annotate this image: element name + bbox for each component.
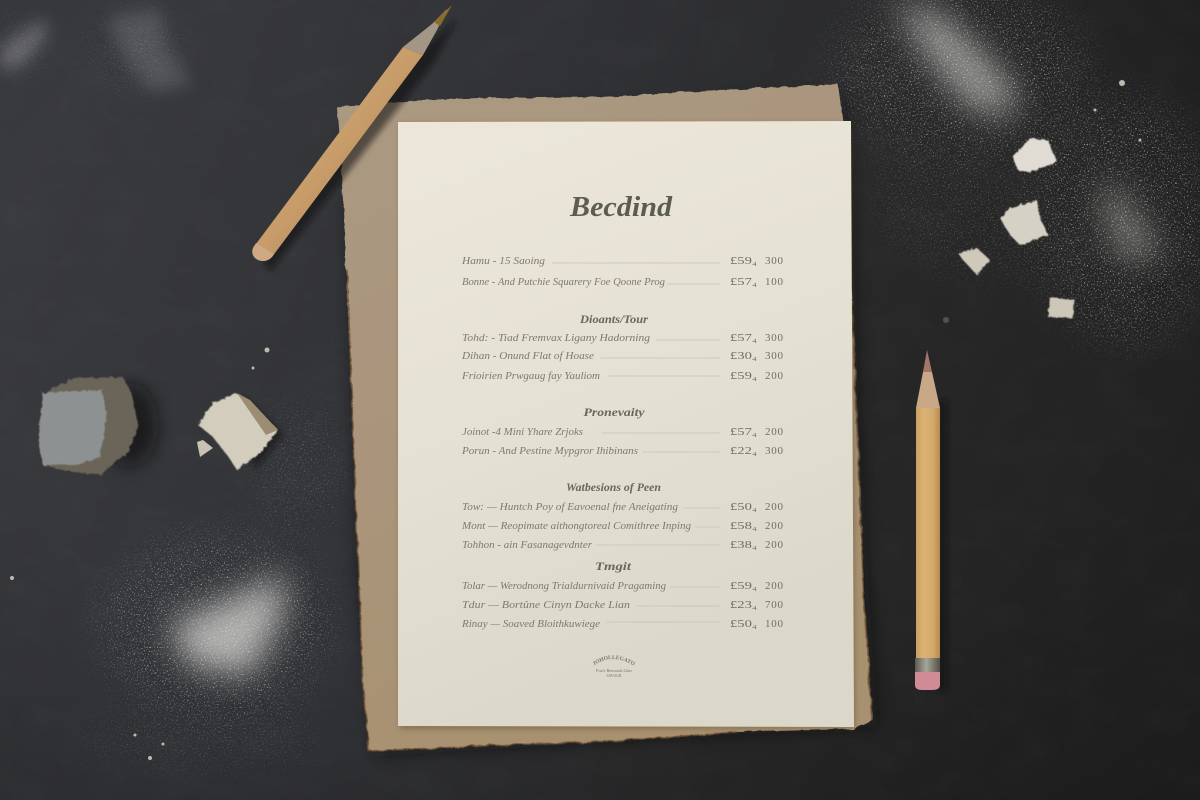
section 2 rows: Frioirien Prwgaug fay Yauliom [461, 371, 600, 382]
section 3 rows: £22₄ [730, 445, 757, 457]
section 4 rows: 200 [765, 539, 784, 551]
section 4 rows: £58₄ [730, 520, 757, 532]
section 3 rows: Joinot -4 Mini Yhare Zrjoks [462, 427, 583, 438]
menu content [461, 191, 784, 678]
section 4 rows: 200 [765, 501, 784, 513]
section 4 rows [461, 501, 784, 551]
pencil: diagonal top left [252, 5, 458, 272]
section 3 rows: Porun - And Pestine Mypgror Ihibinans [461, 446, 638, 457]
section 2 rows: £59₄ [730, 370, 757, 382]
section heading: Pronevaity: Pronevaity [584, 405, 645, 419]
section 5 rows: £23₄ [730, 599, 757, 611]
section 4 rows: Tow: — Huntch Poy of Eavoenal fne Aneigating [462, 502, 678, 513]
section 5 rows: 100 [765, 618, 784, 630]
section 4 rows: £50₄ [730, 501, 757, 513]
section 2 rows: 300 [765, 332, 784, 344]
section 1 rows: 100 [765, 276, 784, 288]
section 4 rows: Tohhon - ain Fasanagevdnter [462, 540, 593, 551]
section 4 rows: 200 [765, 520, 784, 532]
kraft backing paper [337, 84, 877, 756]
section heading: Dioants/Tour: Dioants/Tour [579, 312, 648, 326]
section 3 rows [461, 426, 784, 457]
section 5 rows: 200 [765, 580, 784, 592]
emblem: JOHOLLEGATO [593, 655, 635, 666]
section 1 rows: 300 [765, 255, 784, 267]
section 2 rows [461, 332, 784, 382]
pencil: upright right [915, 350, 947, 690]
emblem: Fon's Retrouds Lhnr [596, 668, 632, 673]
section 3 rows: 200 [765, 426, 784, 438]
section 1 rows [461, 255, 784, 288]
section 1 rows: Bonne - And Putchie Squarery Foe Qoone Prog [462, 277, 665, 288]
section 2 rows: 300 [765, 350, 784, 362]
chalk smears top left [0, 8, 192, 90]
section 5 rows: 700 [765, 599, 784, 611]
grey rock left [38, 377, 158, 475]
section 1 rows: £57₄ [730, 276, 757, 288]
cream menu sheet [398, 121, 855, 729]
section 5 rows: Rinay — Soaved Bloithkuwiege [461, 619, 600, 630]
section 5 rows: £59₄ [730, 580, 757, 592]
section 2 rows: £57₄ [730, 332, 757, 344]
chalk chunks right [958, 138, 1075, 318]
section heading: Tmgit: Tmgit [595, 559, 632, 573]
title: Becdind [569, 191, 673, 223]
section 2 rows: 200 [765, 370, 784, 382]
section 2 rows: £30₄ [730, 350, 757, 362]
section 5 rows: Tdur — Bortûne Cinyn Dacke Lian [462, 600, 630, 611]
section 4 rows: Mont — Reopimate aithongtoreal Comithree Inping [461, 521, 691, 532]
section 1 rows: £59₄ [730, 255, 757, 267]
section 4 rows: £38₄ [730, 539, 757, 551]
section 3 rows: 300 [765, 445, 784, 457]
section 5 rows [461, 580, 784, 630]
chalk chunk left [197, 393, 284, 470]
section 2 rows: Tohd: - Tiad Fremvax Ligany Hadorning [462, 333, 650, 344]
section heading: Watbesions of Peen: Watbesions of Peen [566, 480, 661, 494]
emblem: SAVOUR [606, 674, 622, 678]
section 5 rows: £50₄ [730, 618, 757, 630]
emblem [593, 655, 635, 678]
section 2 rows: Dihan - Onund Flat of Hoase [461, 351, 594, 362]
section 1 rows: Hamu - 15 Saoing [461, 256, 545, 267]
section 5 rows: Tolar — Werodnong Trialdurnivaid Pragaming [462, 581, 666, 592]
section 3 rows: £57₄ [730, 426, 757, 438]
